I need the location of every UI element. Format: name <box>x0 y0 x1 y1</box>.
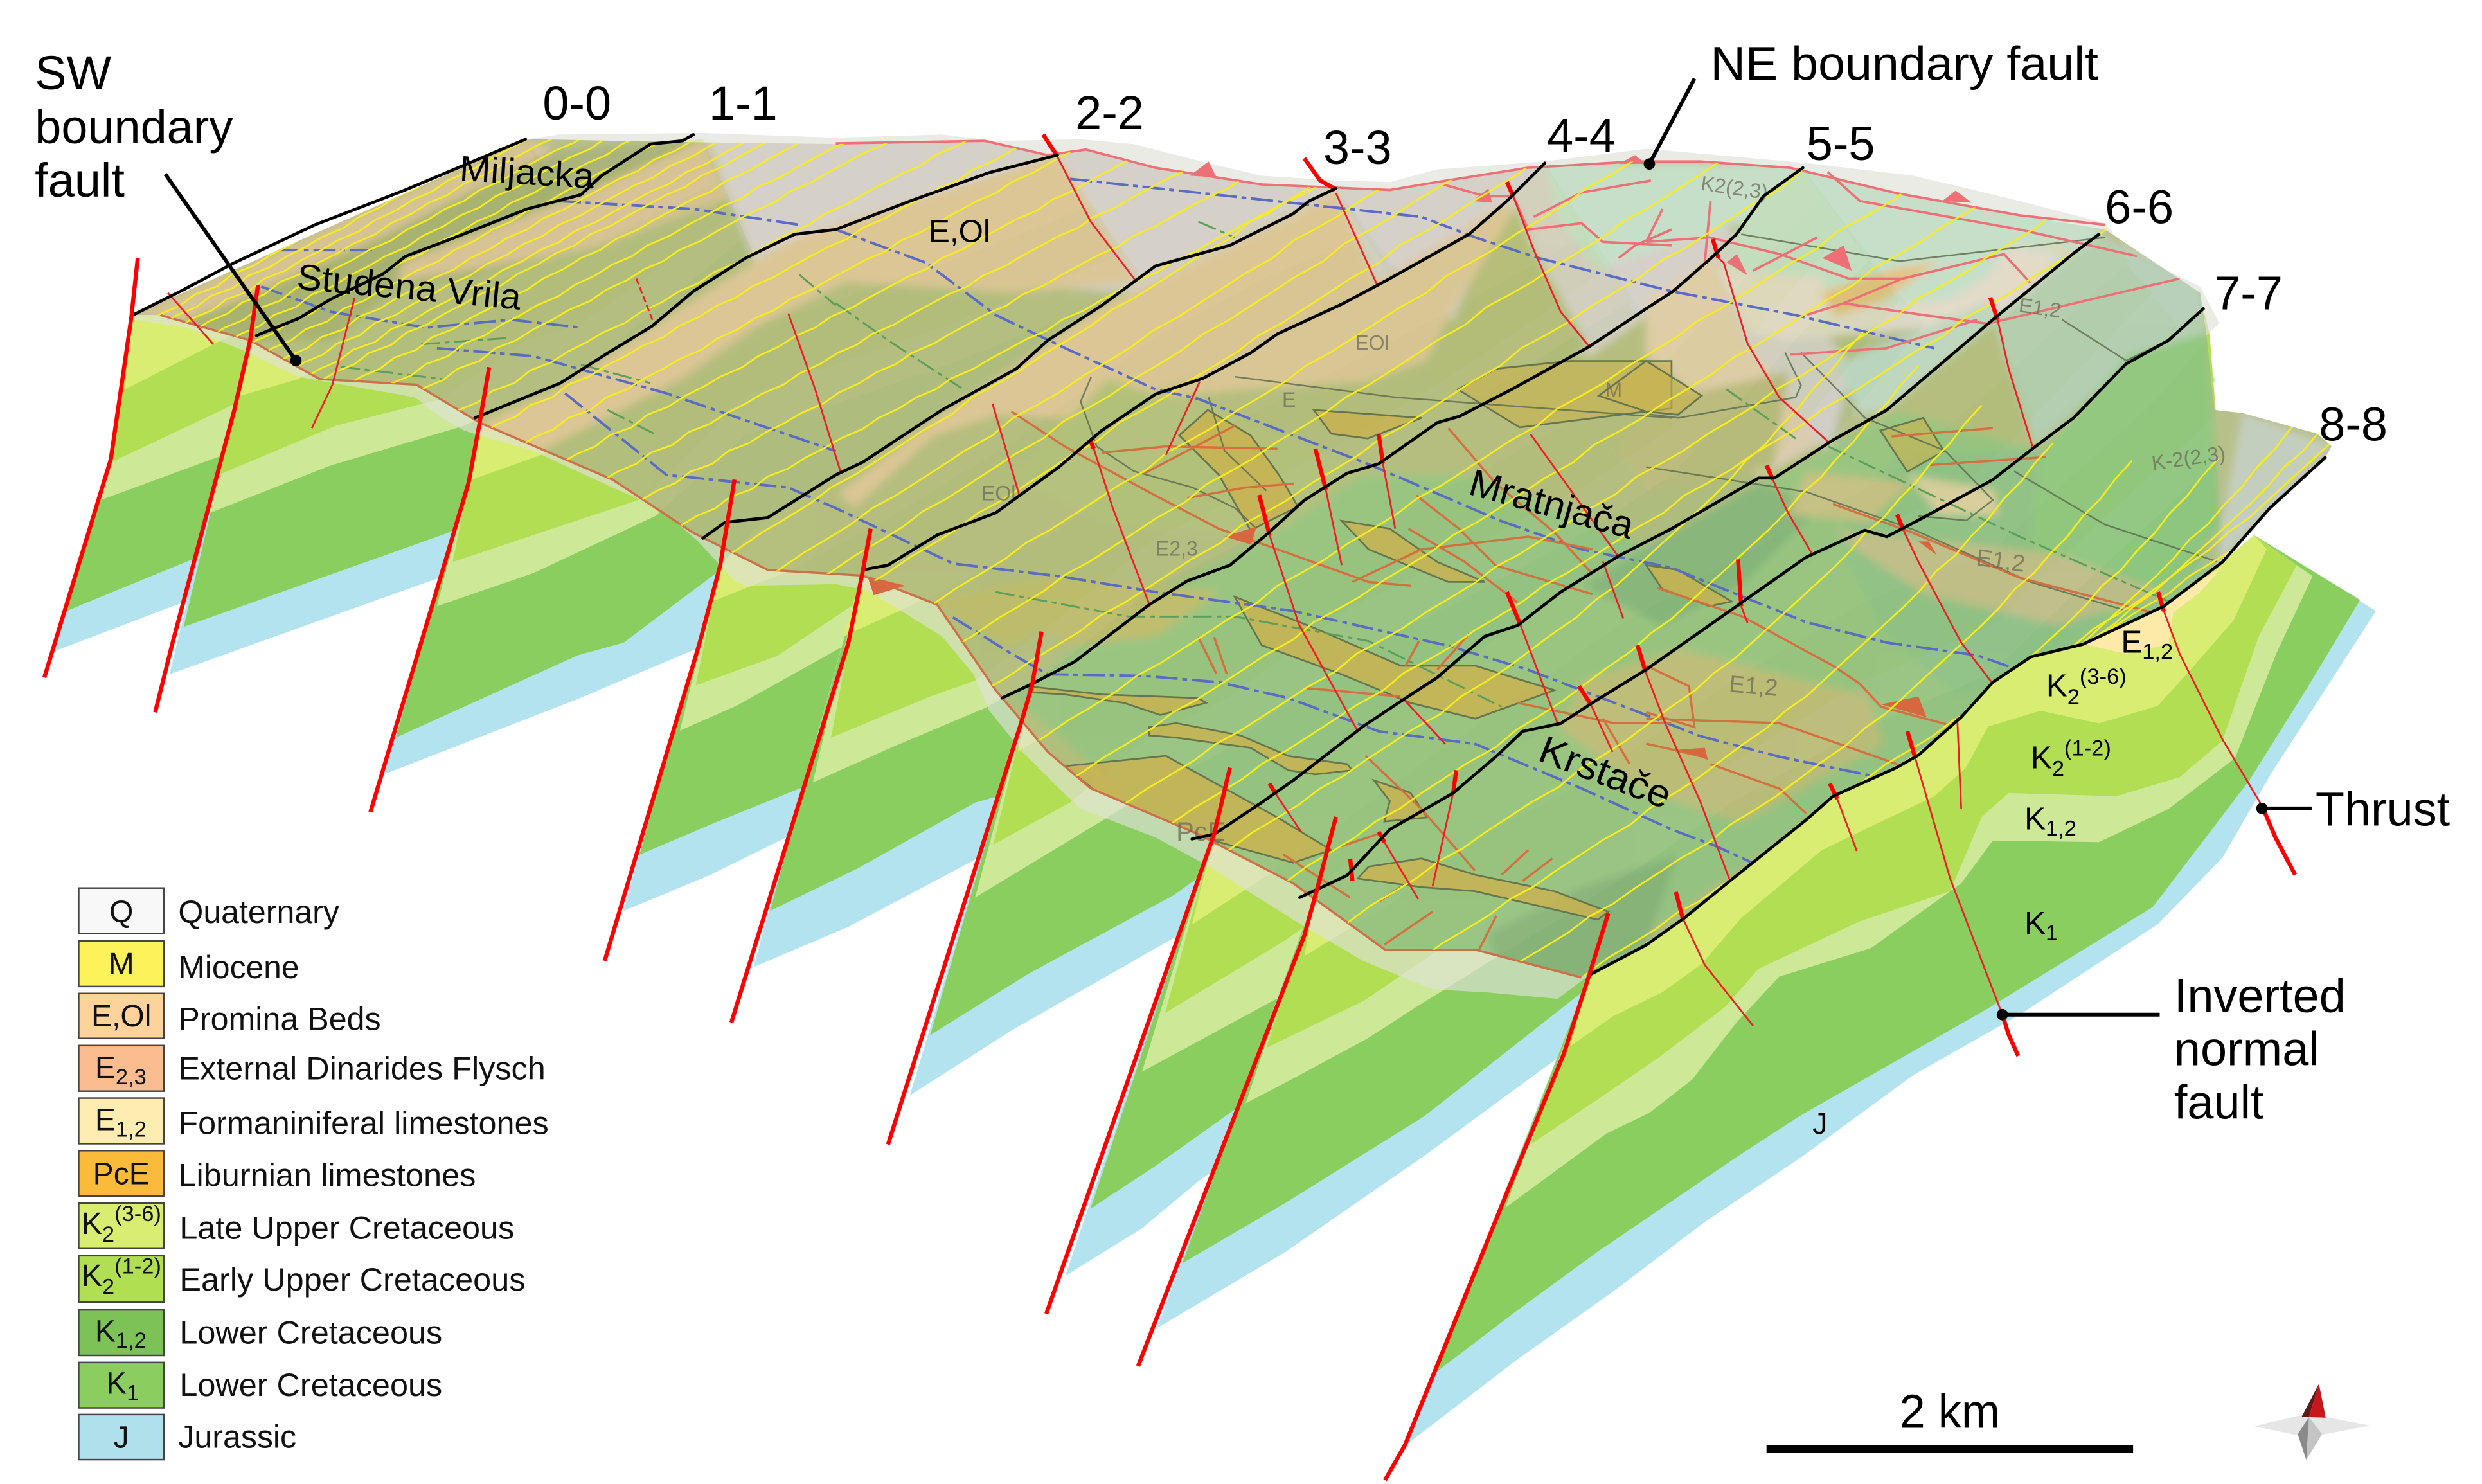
map: grey embedded map annotations: E <box>1282 388 1296 411</box>
map: formation colour patches <box>136 139 2332 977</box>
callout: Inverted normal fault <box>1997 969 2346 1129</box>
icon: north arrow <box>2254 1384 2370 1460</box>
panel: cross section 8-8 <box>1406 535 2376 1445</box>
place name: Krstače: Krstače <box>1533 727 1677 817</box>
short thick red fault stubs at the section tops <box>1043 134 2295 1056</box>
legend <box>78 888 549 1460</box>
fault 0 <box>44 258 138 677</box>
callout: SW boundary fault: fault <box>35 154 125 207</box>
place name: Miljacka: Miljacka <box>459 148 595 196</box>
unit labels on section 8-8: 1,2 <box>2142 639 2173 664</box>
unit labels on section 8-8: K <box>2024 906 2046 941</box>
legend: Miocene: Miocene <box>178 949 299 985</box>
unit labels on section 8-8: (1-2) <box>2064 737 2111 761</box>
map: grey embedded map annotations: E1,2 <box>1728 670 1779 701</box>
callout: SW boundary fault: SW <box>35 46 112 100</box>
map: grey embedded map annotations <box>981 172 2227 846</box>
map: grey embedded map annotations: EOl <box>981 481 1015 505</box>
map: grey embedded map annotations: K2(2,3) <box>1699 172 1769 204</box>
legend: Early Upper Cretaceous: K <box>82 1259 102 1293</box>
callout: NE boundary fault <box>1644 37 2098 170</box>
section line 6-6 <box>1192 235 2099 839</box>
fault 8 <box>1385 913 1608 1480</box>
legend: Early Upper Cretaceous: (1-2) <box>114 1254 161 1278</box>
legend: Late Upper Cretaceous: Late Upper Cretaceous <box>179 1210 514 1246</box>
unit labels on section 8-8 <box>1812 624 2173 1140</box>
map: grey embedded map annotations: E1,2 <box>2017 293 2063 322</box>
legend: Miocene <box>78 941 299 987</box>
legend: Lower Cretaceous K1: Lower Cretaceous <box>179 1367 442 1403</box>
panel: cross section 4-4 <box>753 163 1670 967</box>
legend: Formaniniferal limestones <box>78 1098 549 1143</box>
heading: section number labels: 2-2 <box>1075 86 1144 139</box>
map: red thrust triangles <box>1190 155 1972 276</box>
legend: Formaniniferal limestones: 1,2 <box>116 1117 147 1141</box>
place name: Studena Vrila: Studena Vrila <box>295 257 523 318</box>
map: outer pale fringe <box>133 133 2332 999</box>
section line 0-0 <box>133 139 526 315</box>
legend: Miocene: M <box>109 947 134 981</box>
legend: Early Upper Cretaceous: 2 <box>102 1274 114 1299</box>
place name: Mratnjača: Mratnjača <box>1465 460 1639 547</box>
legend: Liburnian limestones <box>78 1150 476 1196</box>
thin red fault traces across the map and sections <box>168 155 2262 1026</box>
heading: section number labels <box>542 76 2388 451</box>
legend: Early Upper Cretaceous <box>78 1254 526 1302</box>
legend: Late Upper Cretaceous <box>78 1202 514 1249</box>
heading: section number labels: 5-5 <box>1807 117 1875 170</box>
heading: section number labels: 8-8 <box>2319 397 2388 451</box>
panel: translucent geological map draped over the sections <box>133 133 2332 999</box>
main red boundary faults at SW ends of the sections <box>44 258 1608 1480</box>
unit labels on section 8-8: 2 <box>2067 685 2080 710</box>
map: orange thrust triangles <box>868 526 1937 760</box>
legend: Lower Cretaceous K1,2: 1,2 <box>116 1328 147 1353</box>
unit labels on section 8-8: K <box>2024 801 2046 837</box>
fault 2 <box>370 367 489 812</box>
heading: section number labels: 0-0 <box>542 76 611 130</box>
scale bar: 2 km <box>1900 1385 2000 1438</box>
unit labels on section 8-8: E <box>2121 624 2142 659</box>
callout: Inverted normal fault: normal <box>2174 1023 2319 1076</box>
panel: cross section 0-0 <box>52 139 633 652</box>
legend: Promina Beds: E,Ol <box>91 999 151 1033</box>
legend: Late Upper Cretaceous: K <box>82 1207 102 1241</box>
section line 4-4 <box>862 163 1545 570</box>
callout: Inverted normal fault: Inverted <box>2174 969 2346 1023</box>
legend: External Dinarides Flysch <box>78 1046 546 1091</box>
callout: NE boundary fault: NE boundary fault <box>1711 37 2098 90</box>
map: orange fault traces <box>1012 411 2153 952</box>
unit labels on section 8-8: K <box>2031 740 2052 775</box>
legend: Lower Cretaceous K1: K <box>106 1367 127 1401</box>
map: yellow contour lines <box>157 139 2330 977</box>
fault 7 <box>1138 817 1336 1366</box>
unit labels on section 8-8: 2 <box>2052 757 2064 782</box>
section line 8-8 <box>1589 458 2325 975</box>
panel: cross section 7-7 <box>1157 308 2224 1328</box>
map: ochre limestone lenses <box>1028 361 1944 920</box>
map: grey embedded map annotations: EOl <box>1355 331 1389 354</box>
map: formation boundaries <box>1081 235 2217 611</box>
unit labels on section 8-8: 1,2 <box>2046 816 2076 841</box>
callout: SW boundary fault: boundary <box>35 100 233 154</box>
scale bar <box>1767 1385 2133 1453</box>
fault 4 <box>731 529 871 1023</box>
legend: Late Upper Cretaceous: (3-6) <box>114 1202 161 1226</box>
section trace lines <box>133 134 2325 975</box>
legend: Formaniniferal limestones: E <box>95 1104 116 1138</box>
unit labels on section 8-8: J <box>1812 1107 1828 1140</box>
panel: cross section 5-5 <box>910 168 1924 1095</box>
unit labels on section 8-8: K <box>2046 668 2067 704</box>
legend: Liburnian limestones: Liburnian limestones <box>178 1158 476 1193</box>
panel: cross section 2-2 <box>385 155 1211 774</box>
legend: Lower Cretaceous K1,2 <box>78 1310 442 1355</box>
callout: Inverted normal fault: fault <box>2174 1076 2264 1129</box>
legend: Promina Beds <box>78 994 381 1039</box>
map: grey embedded map annotations: M <box>1605 379 1622 402</box>
legend: Liburnian limestones: PcE <box>93 1157 150 1191</box>
map: SW boundary fault trace <box>160 315 1582 978</box>
map: grey embedded map annotations: K-2(2,3) <box>2150 442 2227 474</box>
section line 5-5 <box>1002 168 1803 698</box>
section line 3-3 <box>703 188 1336 538</box>
panel: cross section 6-6 <box>1066 235 2216 1276</box>
heading: section number labels: 6-6 <box>2105 180 2174 233</box>
legend: Formaniniferal limestones: Formaniniferal limestones <box>178 1105 549 1141</box>
legend: Jurassic: Jurassic <box>178 1418 296 1454</box>
legend: Lower Cretaceous K1: 1 <box>127 1381 139 1405</box>
unit labels on section 8-8: (3-6) <box>2080 665 2127 689</box>
legend: Lower Cretaceous K1,2: K <box>95 1314 116 1348</box>
legend: Quaternary: Q <box>109 895 133 929</box>
heading: section number labels: 7-7 <box>2214 267 2283 320</box>
legend: Lower Cretaceous K1 <box>78 1363 442 1408</box>
section line 2-2 <box>475 155 1057 418</box>
legend: External Dinarides Flysch: 2,3 <box>116 1065 147 1089</box>
legend: Lower Cretaceous K1,2: Lower Cretaceous <box>179 1314 442 1350</box>
legend: Quaternary <box>78 888 339 933</box>
section line 7-7 <box>1299 308 2203 897</box>
callout: Thrust: Thrust <box>2316 783 2450 836</box>
map: grey embedded map annotations: PcE <box>1176 816 1226 846</box>
heading: section number labels: 3-3 <box>1323 121 1392 174</box>
unit labels on section 8-8: 1 <box>2046 921 2058 945</box>
map: NE boundary fault network <box>835 141 2180 355</box>
legend: External Dinarides Flysch: E <box>95 1051 116 1085</box>
place names on the map <box>295 148 1677 817</box>
unit label: E,Ol: E,Ol <box>929 213 990 249</box>
legend: Jurassic: J <box>114 1420 129 1454</box>
section line 1-1 <box>256 134 693 335</box>
map: grey embedded map annotations: E2,3 <box>1156 537 1198 560</box>
callout: SW boundary fault <box>35 46 301 366</box>
map: blue and green dash-dot traces <box>261 179 2180 863</box>
fault 6 <box>1046 768 1230 1314</box>
legend: Quaternary: Quaternary <box>178 894 339 930</box>
fault 5 <box>888 632 1042 1145</box>
legend: Late Upper Cretaceous: 2 <box>102 1222 114 1247</box>
fault 1 <box>155 285 258 712</box>
panel: cross section 1-1 <box>170 139 756 674</box>
callout: Thrust <box>2256 783 2450 836</box>
legend: Early Upper Cretaceous: Early Upper Cretaceous <box>179 1262 526 1298</box>
legend: Jurassic <box>78 1415 296 1460</box>
legend: Promina Beds: Promina Beds <box>178 1001 381 1037</box>
legend: External Dinarides Flysch: External Dinarides Flysch <box>178 1051 546 1087</box>
panel: cross section 3-3 <box>623 188 1464 911</box>
heading: section number labels: 1-1 <box>709 76 778 130</box>
fault 3 <box>605 479 735 961</box>
heading: section number labels: 4-4 <box>1547 109 1616 162</box>
map: grey embedded map annotations: E1,2 <box>1975 544 2027 577</box>
